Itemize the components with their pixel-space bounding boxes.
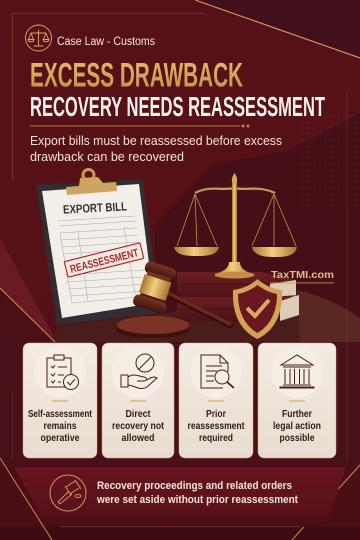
- panel: conclusion band: [14, 467, 346, 527]
- conclusion text: [96, 480, 298, 506]
- card text: legal action: [273, 420, 321, 432]
- clipboard clip: [66, 170, 117, 195]
- panel: further legal action card: [258, 343, 336, 458]
- card text: [273, 408, 321, 444]
- conclusion text: Recovery proceedings and related orders: [97, 480, 292, 492]
- illustration: shield with check: [233, 279, 282, 339]
- reassessment stamp: REASSESSMENT: [69, 247, 140, 276]
- illustration: gold scales: [174, 173, 297, 278]
- card text: possible: [280, 432, 315, 444]
- card text: Self-assessment: [28, 408, 92, 420]
- icon: courthouse: [280, 355, 314, 388]
- panel: direct recovery card: [102, 343, 174, 458]
- card text: Direct: [126, 408, 151, 420]
- card text: reassessment: [188, 420, 245, 432]
- card text: remains: [44, 420, 77, 432]
- icon: checklist: [47, 355, 78, 390]
- card text: [188, 408, 245, 444]
- panel: self-assessment card: [23, 343, 97, 458]
- subtitle: [30, 134, 282, 164]
- watermark: TaxTMI.com: [271, 269, 334, 281]
- illustration: law books: [177, 272, 299, 321]
- card text: recovery not: [112, 420, 164, 432]
- bill heading: EXPORT BILL: [63, 199, 127, 217]
- icon: hand with prohibition sign: [121, 354, 157, 389]
- badge: scales icon and category: [26, 25, 155, 51]
- title divider: [30, 124, 250, 128]
- card text: [112, 408, 164, 444]
- conclusion text: were set aside without prior reassessment: [96, 494, 298, 506]
- icon: gavel in circle: [50, 475, 86, 511]
- panel: prior reassessment card: [179, 343, 253, 458]
- icon: scales in circle: [26, 25, 52, 51]
- card text: Further: [282, 408, 312, 420]
- icon: document with magnifier: [201, 355, 234, 388]
- card text: required: [199, 432, 233, 444]
- card text: operative: [40, 432, 80, 444]
- card text: Prior: [206, 408, 226, 420]
- subtitle: drawback can be recovered: [30, 150, 184, 164]
- category label: Case Law - Customs: [57, 36, 155, 48]
- card text: [28, 408, 92, 444]
- illustration: gavel: [116, 260, 230, 338]
- illustration: export bill clipboard: [36, 170, 160, 325]
- subtitle: Export bills must be reassessed before excess: [30, 134, 282, 148]
- bill table: [58, 216, 148, 303]
- card text: allowed: [122, 432, 154, 444]
- title: [30, 56, 325, 122]
